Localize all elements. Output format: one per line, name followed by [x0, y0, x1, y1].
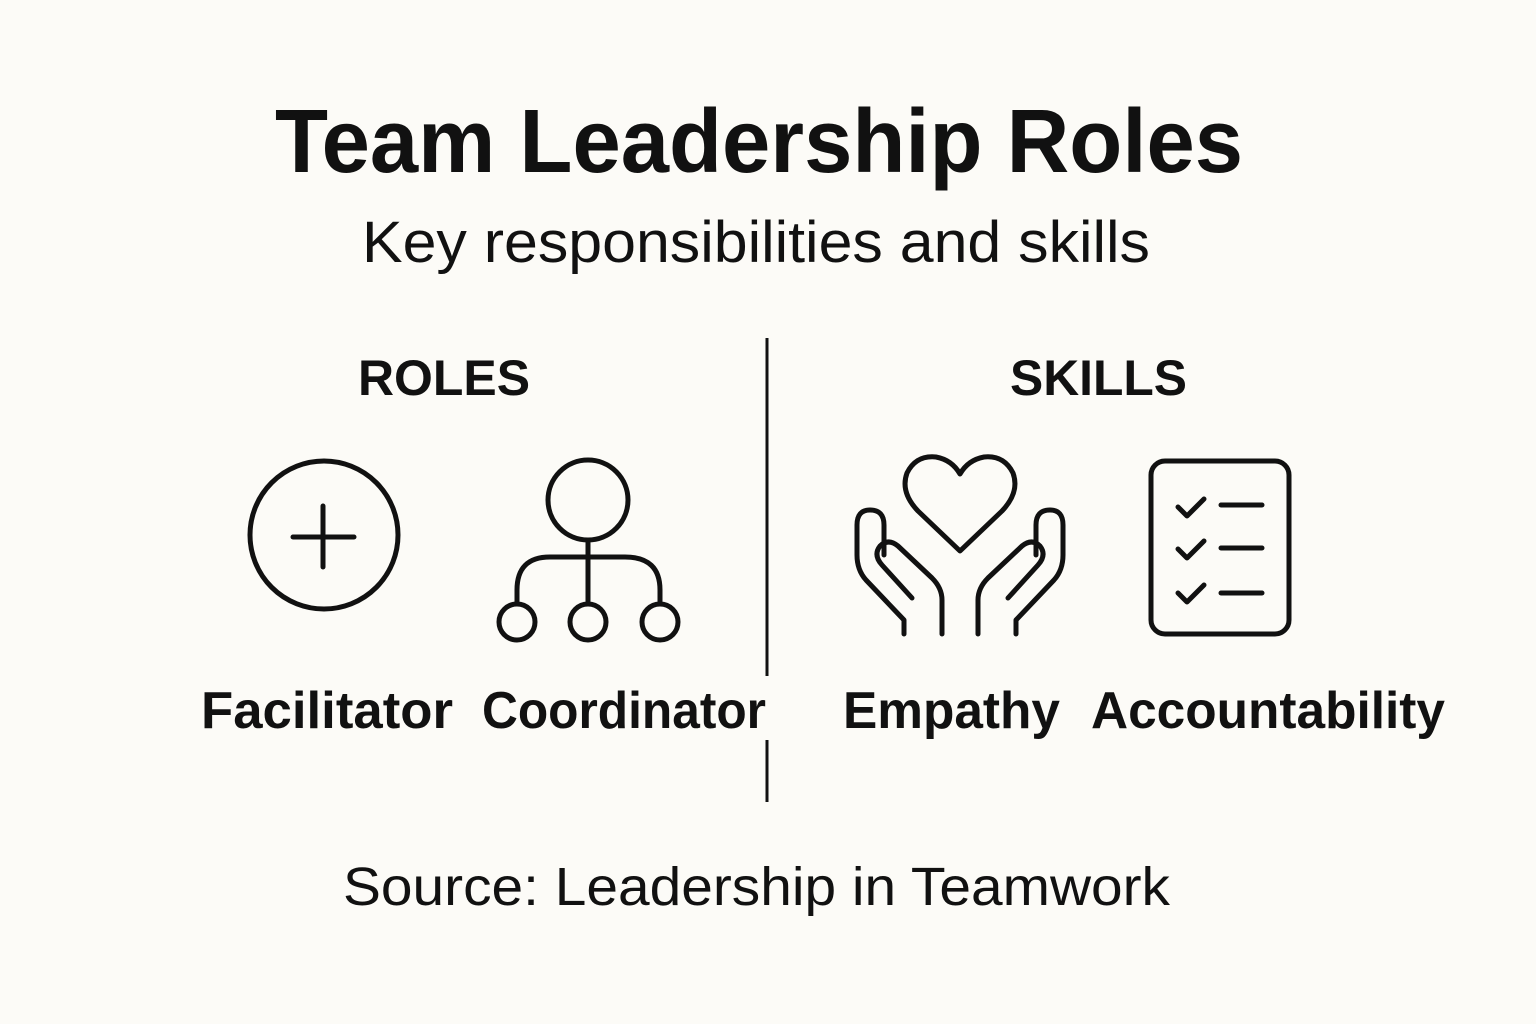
- icon: empathy hands and heart: [857, 457, 1063, 634]
- icon: facilitator plus circle: [250, 461, 398, 609]
- heading: skills: SKILLS: [1010, 350, 1187, 406]
- label: coordinator: Coordinator: [482, 682, 766, 740]
- label: empathy: Empathy: [843, 682, 1060, 740]
- label: facilitator: Facilitator: [201, 682, 453, 740]
- title: Team Leadership Roles: [275, 92, 1243, 192]
- divider: [766, 338, 768, 802]
- source note: Source: Leadership in Teamwork: [343, 857, 1171, 917]
- icon: coordinator hierarchy: [499, 460, 678, 640]
- label: accountability: Accountability: [1091, 682, 1445, 740]
- icon: accountability checklist: [1151, 461, 1289, 634]
- heading: roles: ROLES: [358, 350, 530, 406]
- subtitle: Key responsibilities and skills: [362, 210, 1150, 275]
